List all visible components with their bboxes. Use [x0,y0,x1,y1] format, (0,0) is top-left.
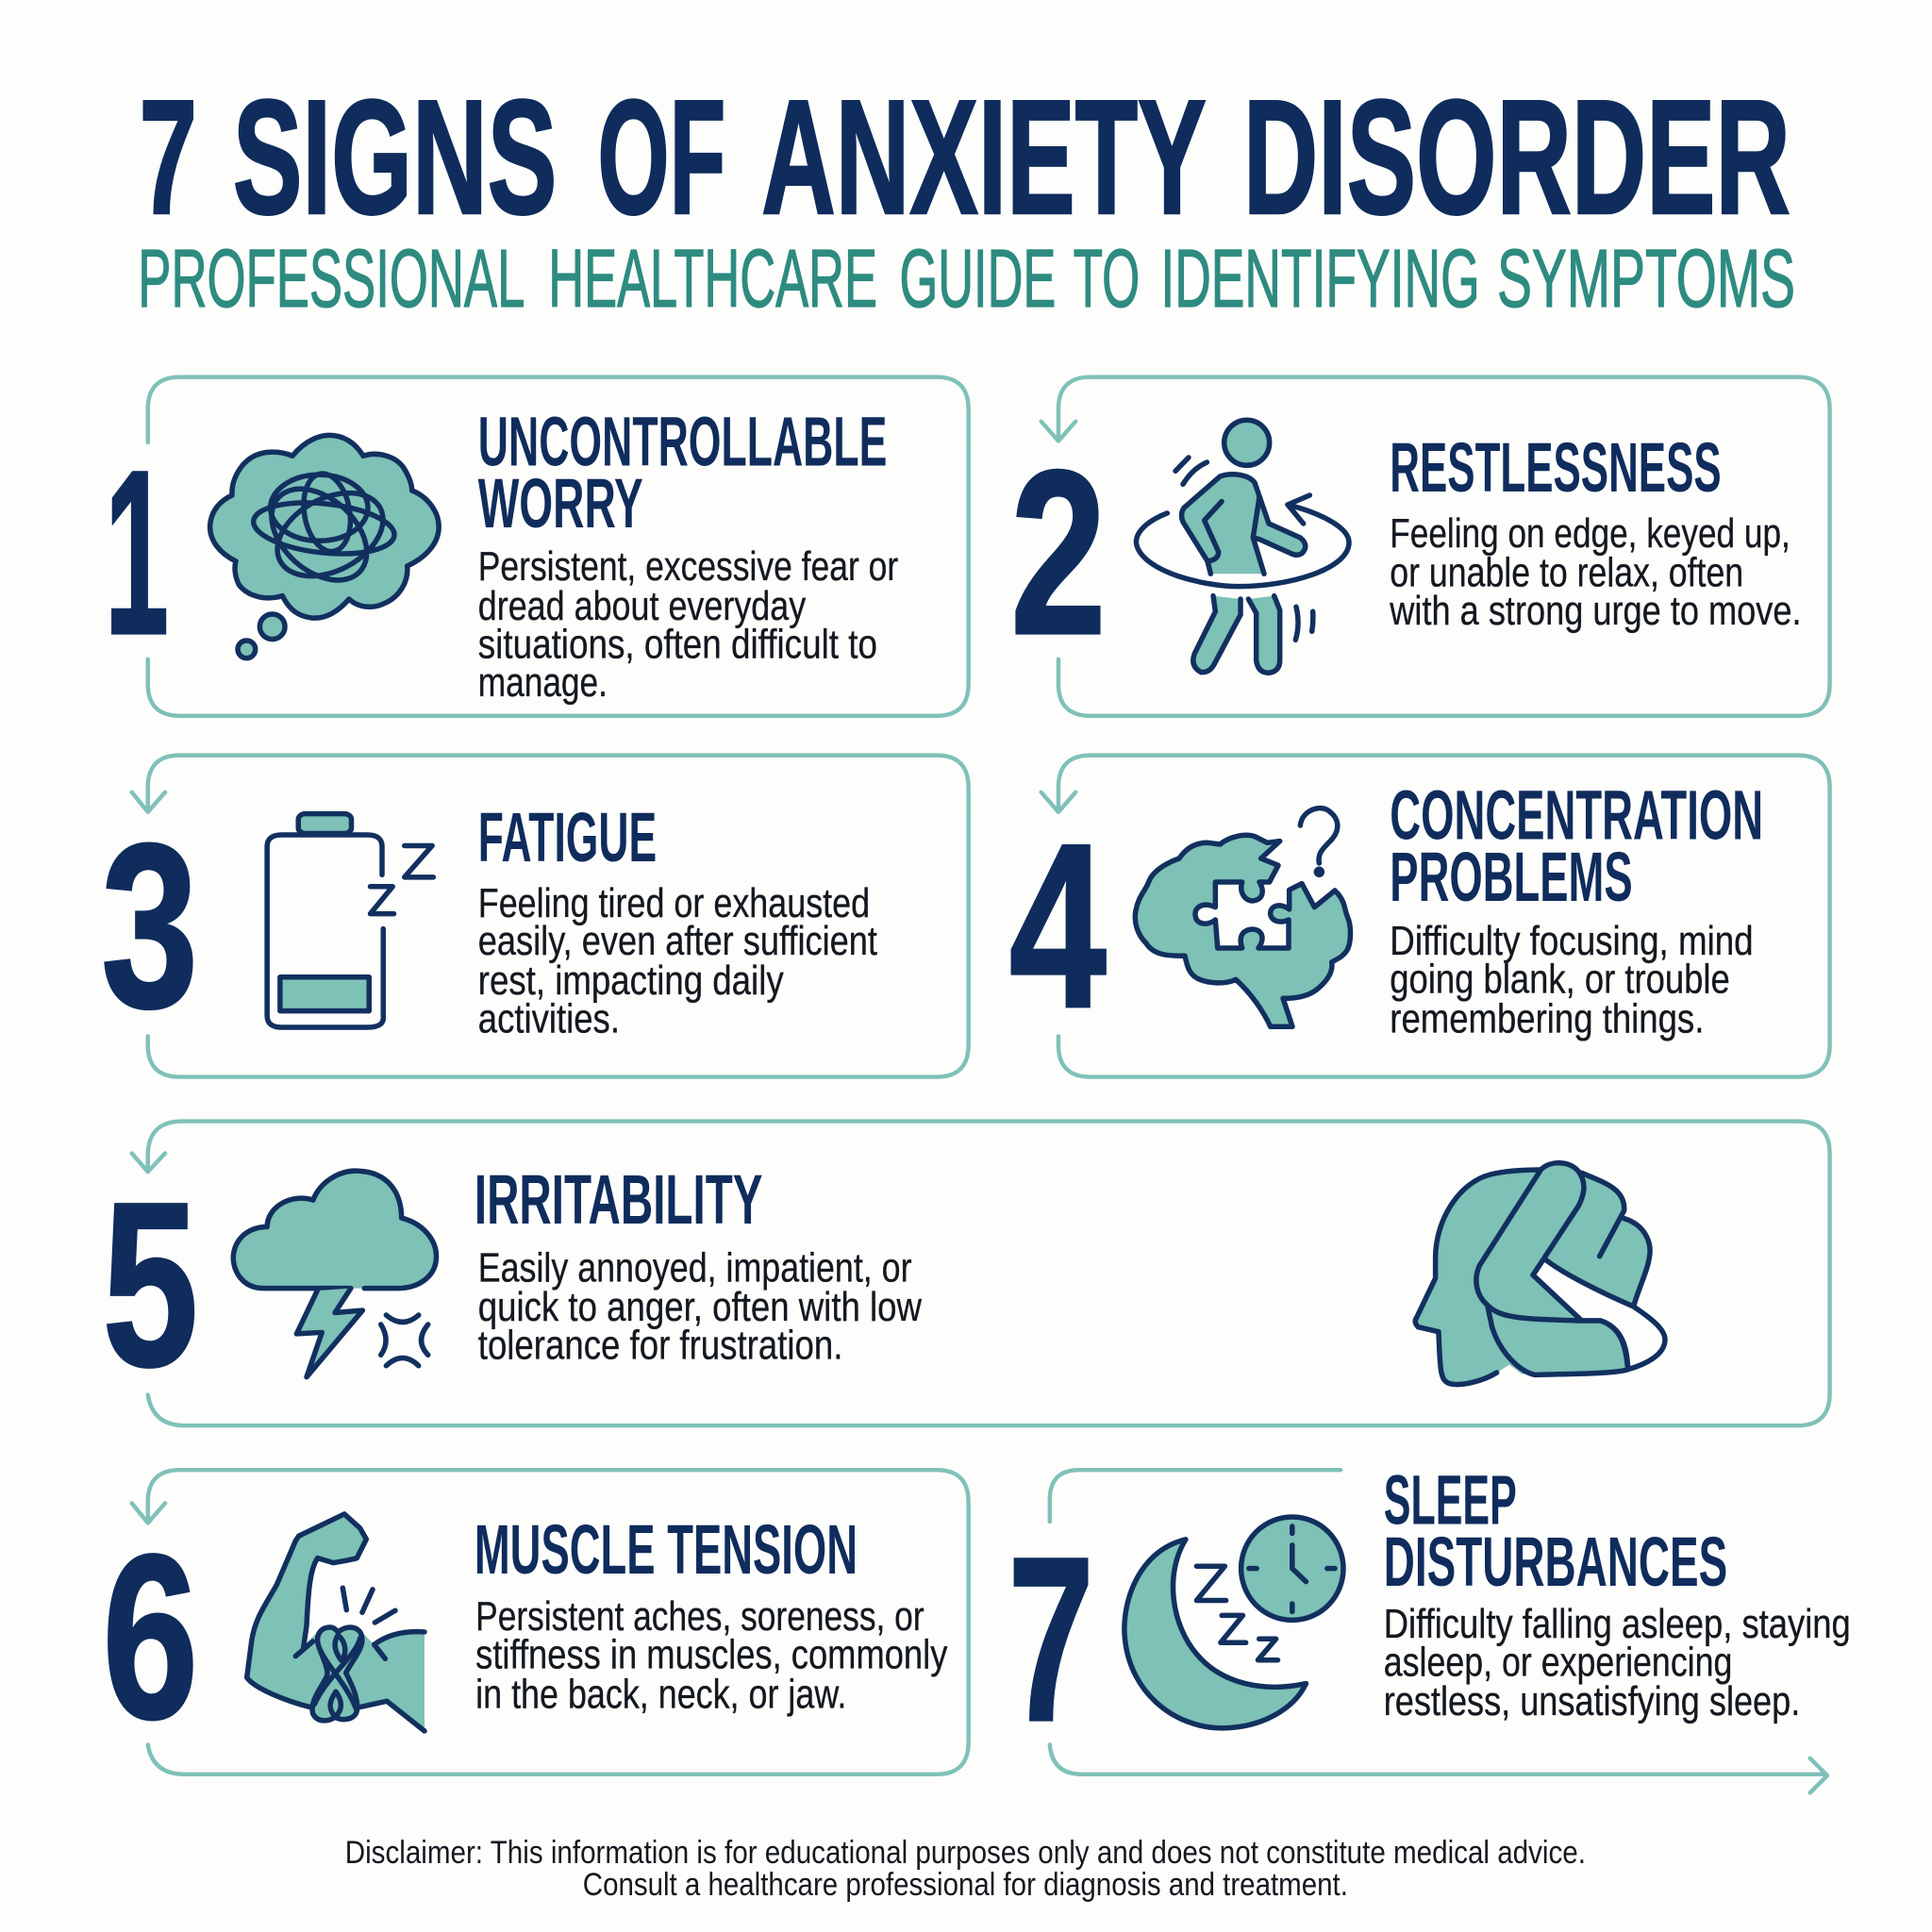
description: easily, even after sufficient [478,919,877,964]
subtitle: TO [1074,232,1140,325]
description [478,544,898,706]
heading [1384,1461,1727,1601]
heading [1390,775,1763,916]
heading: FATIGUE [478,798,657,876]
title [140,66,1790,248]
title: ANXIETY [761,66,1207,248]
description [1389,511,1802,634]
description: Feeling tired or exhausted [478,881,870,926]
panel: irritability [102,1122,1830,1425]
subtitle: IDENTIFYING [1160,232,1480,325]
subtitle: PROFESSIONAL [138,232,525,325]
panel: uncontrollable worry: 1 [105,421,169,683]
icon: brain with puzzle piece [1135,808,1350,1026]
title: 7 [140,66,197,248]
description: Difficulty falling asleep, staying [1384,1602,1851,1647]
subtitle: GUIDE [899,232,1056,325]
number 3: 3 [101,794,198,1057]
icon: tangled thought cloud [210,435,439,658]
number 7: 7 [1008,1507,1094,1770]
disclaimer [345,1835,1586,1903]
card border [148,377,969,716]
subtitle: HEALTHCARE [548,232,877,325]
heading [478,403,887,542]
description: asleep, or experiencing [1384,1640,1732,1685]
description [478,1245,923,1369]
description: going blank, or trouble [1390,958,1730,1003]
icon: head held in arm [1415,1163,1665,1385]
icon: storm cloud with lightning [233,1171,437,1377]
icon: restless figure with hoop [1136,420,1349,673]
number 4: 4 [1009,794,1107,1057]
heading: SLEEP [1384,1461,1517,1540]
heading: UNCONTROLLABLE [478,403,887,481]
heading: IRRITABILITY [475,1160,762,1239]
number 6: 6 [102,1506,198,1768]
description [1390,919,1754,1042]
card border with arrow [1041,377,1830,716]
description: tolerance for frustration. [478,1324,842,1369]
title: SIGNS [233,66,557,248]
description: remembering things. [1390,997,1704,1042]
title: OF [597,66,725,248]
icon: flexed arm with knot [247,1514,425,1731]
description [1384,1602,1851,1724]
heading: PROBLEMS [1390,838,1633,916]
description: activities. [478,997,620,1042]
heading: DISTURBANCES [1384,1523,1727,1601]
panel: fatigue [101,756,969,1077]
card border with arrow [132,1122,1830,1425]
card border with arrow [132,756,969,1077]
card border with arrow [1041,756,1830,1077]
description: manage. [478,660,608,706]
icon: low battery [267,814,433,1027]
heading: MUSCLE TENSION [475,1510,858,1589]
description: Difficulty focusing, mind [1390,919,1754,964]
description: dread about everyday [478,584,807,629]
description: restless, unsatisfying sleep. [1384,1679,1800,1724]
icon: moon and clock [1124,1517,1343,1728]
number 2: 2 [1010,421,1107,683]
disclaimer: Disclaimer: This information is for educational purposes only and does not constitute medical advice. [345,1835,1586,1871]
description: Feeling on edge, keyed up, [1390,511,1790,557]
description: Persistent aches, soreness, or [475,1594,924,1640]
description [475,1594,948,1717]
panel: muscle tension [102,1470,969,1774]
description: or unable to relax, often [1390,551,1743,596]
description: Easily annoyed, impatient, or [478,1245,912,1291]
panel: sleep disturbances [1008,1461,1851,1792]
description: Persistent, excessive fear or [478,544,898,590]
card border with arrow [132,1470,969,1774]
panel: concentration problems [1009,756,1830,1077]
description: with a strong urge to move. [1389,589,1802,634]
description: situations, often difficult to [478,622,877,667]
heading: WORRY [478,464,643,542]
description: in the back, neck, or jaw. [475,1672,846,1717]
number 5: 5 [102,1153,198,1415]
card border with arrow [1050,1470,1827,1792]
panel: uncontrollable worry [105,377,969,716]
disclaimer: Consult a healthcare professional for diagnosis and treatment. [583,1867,1348,1903]
description: stiffness in muscles, commonly [475,1632,948,1677]
description: rest, impacting daily [478,958,784,1004]
description [478,881,877,1042]
panel: restlessness [1010,377,1830,716]
subtitle [138,232,1795,325]
description: quick to anger, often with low [478,1285,923,1330]
